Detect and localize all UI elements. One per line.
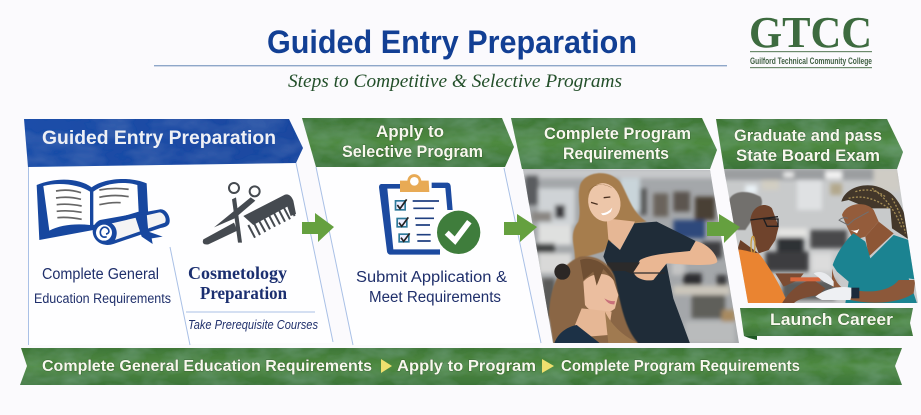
heading: graduate and pass state board exam: Graduate and pass	[734, 126, 882, 145]
heading: complete program requirements: Requirements	[563, 144, 669, 163]
figure: graduate in teal scrubs	[814, 185, 919, 303]
panel: graduate and pass state board exam	[716, 119, 921, 340]
text: cosmetology preparation: Preparation	[200, 283, 287, 303]
text: complete general education requirements: Complete General Education Requirements	[42, 358, 372, 375]
panel: complete program requirements	[511, 118, 745, 347]
text: complete general education requirements	[34, 266, 171, 306]
heading: apply to selective program: Apply to	[376, 122, 444, 141]
text: take prerequisite courses: Take Prerequisite Courses	[188, 318, 318, 332]
text: submit application and meet requirements	[356, 269, 508, 306]
subtitle: Steps to Competitive & Selective Programs	[288, 72, 622, 92]
text: apply to program: Apply to Program	[397, 358, 536, 375]
icon: pointer one	[381, 359, 392, 373]
text: cosmetology preparation	[188, 263, 287, 303]
icon: application clipboard	[379, 174, 482, 255]
heading: guided entry preparation: Guided Entry Preparation	[42, 127, 276, 149]
icon: open book and diploma	[37, 179, 170, 245]
text: submit application and meet requirements: Submit Application &	[356, 269, 508, 286]
heading: graduate and pass state board exam: State Board Exam	[736, 146, 880, 165]
arrow: step one to two	[302, 213, 334, 242]
arrow: step three to four	[707, 214, 740, 243]
heading: complete program requirements: Complete Program	[544, 124, 691, 143]
panel: guided entry preparation	[24, 119, 333, 345]
text: complete general education requirements: Education Requirements	[34, 291, 171, 306]
logo: GTCC: GTCC	[749, 8, 872, 57]
icon: pointer two	[542, 359, 554, 373]
logo: GTCC: Guilford Technical Community College	[750, 56, 872, 67]
icon: scissors and comb	[203, 183, 296, 244]
heading: apply to selective program	[302, 118, 514, 167]
title: Guided Entry Preparation	[267, 24, 637, 60]
text: complete program requirements: Complete Program Requirements	[561, 358, 800, 375]
text: cosmetology preparation: Cosmetology	[188, 263, 287, 283]
heading: graduate and pass state board exam	[716, 119, 903, 169]
arrow: step two to three	[504, 214, 537, 242]
photo: patient and graduate	[722, 165, 921, 308]
figure: seated student	[549, 256, 638, 343]
text: complete general education requirements: Complete General	[42, 266, 159, 283]
heading: guided entry preparation	[24, 119, 303, 167]
heading: complete program requirements	[511, 118, 717, 169]
ribbon: launch career: Launch Career	[770, 310, 893, 329]
title rule	[154, 65, 727, 66]
ribbon: process summary	[20, 348, 902, 385]
ribbon: launch career	[740, 308, 913, 340]
text: submit application and meet requirements: Meet Requirements	[369, 289, 501, 306]
photo: stylist and student	[522, 165, 745, 347]
figure: standing stylist	[573, 173, 717, 343]
panel: apply to selective program	[302, 118, 541, 345]
heading: apply to selective program: Selective Program	[342, 142, 483, 161]
figure: patient in orange	[728, 192, 825, 303]
